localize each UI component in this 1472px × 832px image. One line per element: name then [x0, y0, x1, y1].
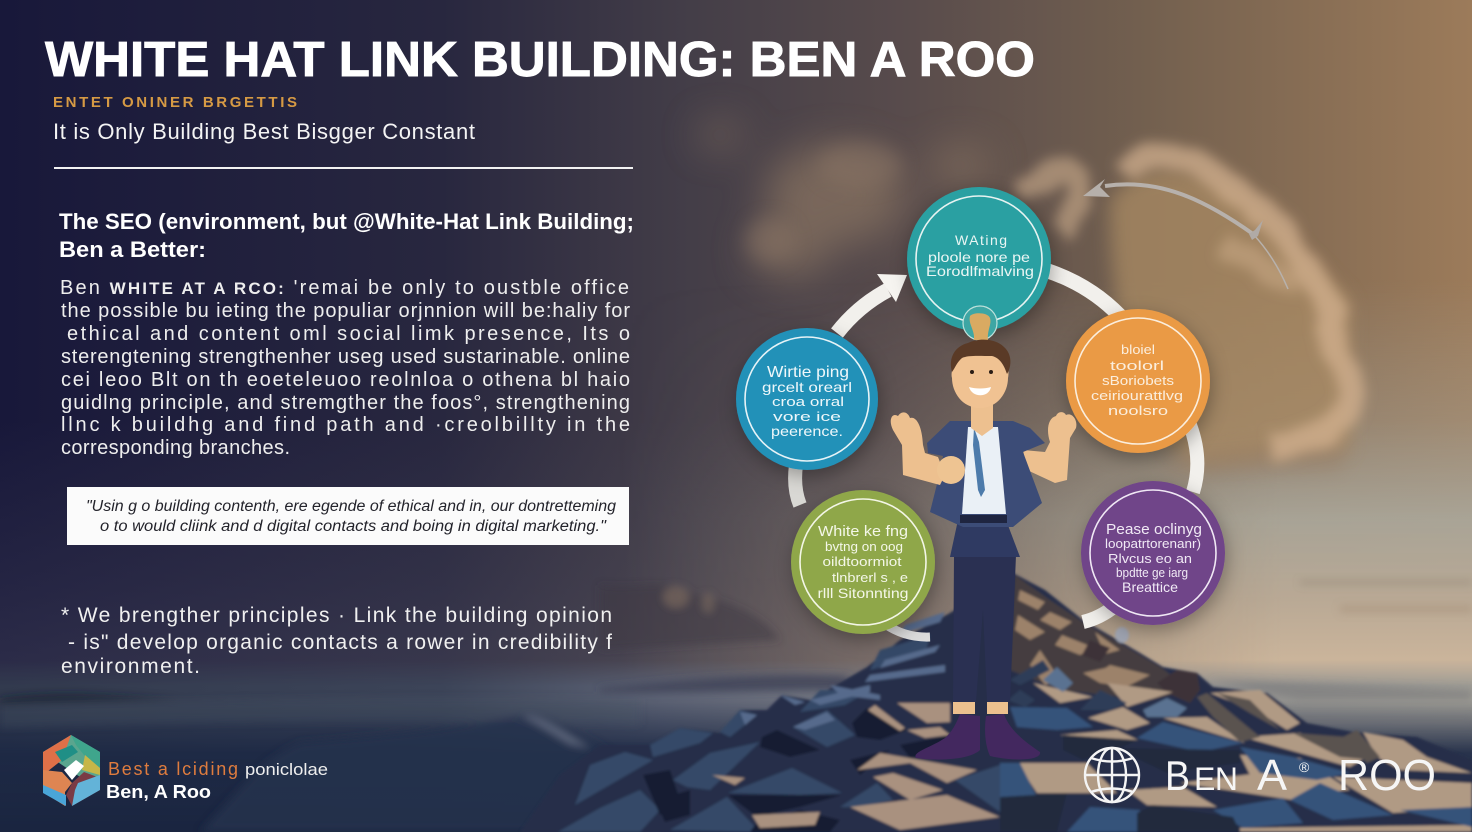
arc segment: green to blue	[795, 465, 800, 505]
body paragraph: llnc k buildhg and find path and ·creolbillty in the	[61, 414, 630, 436]
circle: purple: bpdtte ge iarg	[1116, 565, 1188, 580]
body paragraph: cei leoo Blt on th eoeteleuoo reolnloa o othena bl haio	[61, 369, 630, 391]
circle: green: rlll Sitonnting	[818, 585, 908, 601]
title: WHITE HAT LINK BUILDING: BEN A ROO	[45, 33, 1035, 87]
hips	[950, 520, 1020, 557]
teal label text: WAting	[955, 232, 1007, 248]
body paragraph: sterengtening strengthenher useg used sustarinable. online	[61, 346, 630, 368]
neck	[971, 400, 993, 436]
circle: green: oildtoormiot	[822, 554, 902, 569]
arc segment: teal to orange	[1048, 271, 1120, 316]
section heading	[59, 209, 634, 262]
circle: blue: grcelt orearl	[762, 379, 852, 395]
body paragraph	[60, 277, 630, 459]
circle: purple: loopatrtorenanr)	[1105, 536, 1201, 551]
circle: teal: Eorodlfmalving	[926, 263, 1034, 279]
arc segment: blue to teal	[837, 290, 888, 333]
circle: orange: sBoriobets	[1102, 373, 1175, 388]
body paragraph: Ben WHITE AT A RCO: 'remai be only to oustble office	[60, 277, 629, 299]
arc segment: orange to purple	[1190, 425, 1197, 492]
circle: blue	[736, 328, 878, 470]
brand name: A	[1257, 751, 1288, 800]
bullet paragraph: - is" develop organic contacts a rower in credibility f	[68, 631, 612, 654]
circle: orange	[1066, 309, 1210, 453]
arc segment: green bottom	[885, 624, 930, 637]
body paragraph: ethical and content oml social limk presence, Its o	[67, 323, 630, 345]
circle: orange: ceiriourattlvg	[1091, 388, 1183, 403]
brand name: ROO	[1338, 751, 1436, 800]
logo text: poniclolae	[245, 760, 328, 779]
shoes	[915, 714, 1040, 760]
bullet paragraph	[61, 604, 612, 678]
circle: green: bvtng on oog	[825, 539, 903, 554]
grey ornament on slope	[1115, 627, 1129, 643]
circle: teal: ploole nore pe	[928, 249, 1030, 265]
left rocks	[558, 635, 1000, 832]
circle: orange: toolorl	[1110, 358, 1164, 373]
bullet paragraph: environment.	[61, 655, 200, 678]
eyebrow label: ENTET ONINER BRGETTIS	[53, 94, 297, 111]
rocky mountain peak	[520, 573, 1472, 832]
circle: blue: croa orral	[772, 394, 844, 409]
belt	[960, 515, 1007, 523]
orange label text: bloiel	[1121, 342, 1155, 357]
brand name: ®	[1299, 759, 1310, 775]
divider rule	[54, 167, 633, 169]
logo: hexagon cube	[43, 735, 100, 806]
thin arrow top right	[1083, 179, 1288, 289]
section heading: The SEO (environment, but @White-Hat Link Building;	[59, 209, 634, 234]
quote box: o to would cliink and d digital contacts and boing in digital marketing."	[100, 518, 608, 535]
jacket	[927, 421, 1045, 527]
icon: globe	[1085, 748, 1139, 802]
left arm and hand	[891, 412, 945, 485]
ankles	[953, 702, 1008, 714]
section heading: Ben a Better:	[59, 237, 206, 262]
brand name	[1165, 751, 1436, 800]
eyes and smile	[969, 370, 993, 395]
circle: purple: Breattice	[1122, 579, 1178, 595]
blue label text: Wirtie ping	[767, 364, 849, 381]
body paragraph: the possible bu ieting the populiar orjnnion will be:haliy for	[61, 300, 630, 322]
circle: blue: peerence.	[771, 423, 843, 439]
subtitle: It is Only Building Best Bisgger Constant	[53, 119, 475, 144]
circle: orange: noolsro	[1108, 403, 1168, 418]
figure: smiling man with raised hands	[891, 306, 1076, 760]
circle: purple	[1081, 481, 1225, 625]
green label text: White ke fng	[818, 523, 908, 540]
bullet paragraph: * We brengther principles · Link the building opinion	[61, 604, 612, 627]
legs	[953, 555, 1016, 702]
circle: green: tlnbrerl s , e	[832, 570, 908, 585]
body paragraph: corresponding branches.	[61, 437, 290, 459]
body paragraph: guidlng principle, and stremgther the foos°, strengthening	[61, 392, 630, 414]
brand name: EN	[1194, 761, 1238, 797]
right arm and hand	[1023, 412, 1076, 483]
quote box: "Usin g o building contenth, ere egende of ethical and in, our dontretteming	[86, 498, 616, 515]
logo text: Ben, A Roo	[106, 782, 211, 802]
shirt and lanyard	[962, 427, 1006, 514]
cycle ring with arrows	[795, 271, 1197, 637]
circle: green	[791, 490, 935, 634]
hair	[951, 340, 1010, 374]
brand name: B	[1165, 752, 1190, 799]
circle: purple: Rlvcus eo an	[1108, 551, 1192, 566]
logo text: Best a lciding	[108, 759, 238, 779]
logo text	[106, 759, 328, 802]
purple label text: Pease oclinyg	[1106, 521, 1202, 538]
quote box	[67, 487, 629, 545]
arc segment: purple to green	[1083, 606, 1115, 622]
lightbulb above head	[963, 306, 997, 340]
arrowhead: into teal circle	[877, 274, 907, 302]
circle: blue: vore ice	[773, 409, 841, 424]
head	[952, 355, 1009, 408]
circle: teal	[907, 187, 1051, 331]
